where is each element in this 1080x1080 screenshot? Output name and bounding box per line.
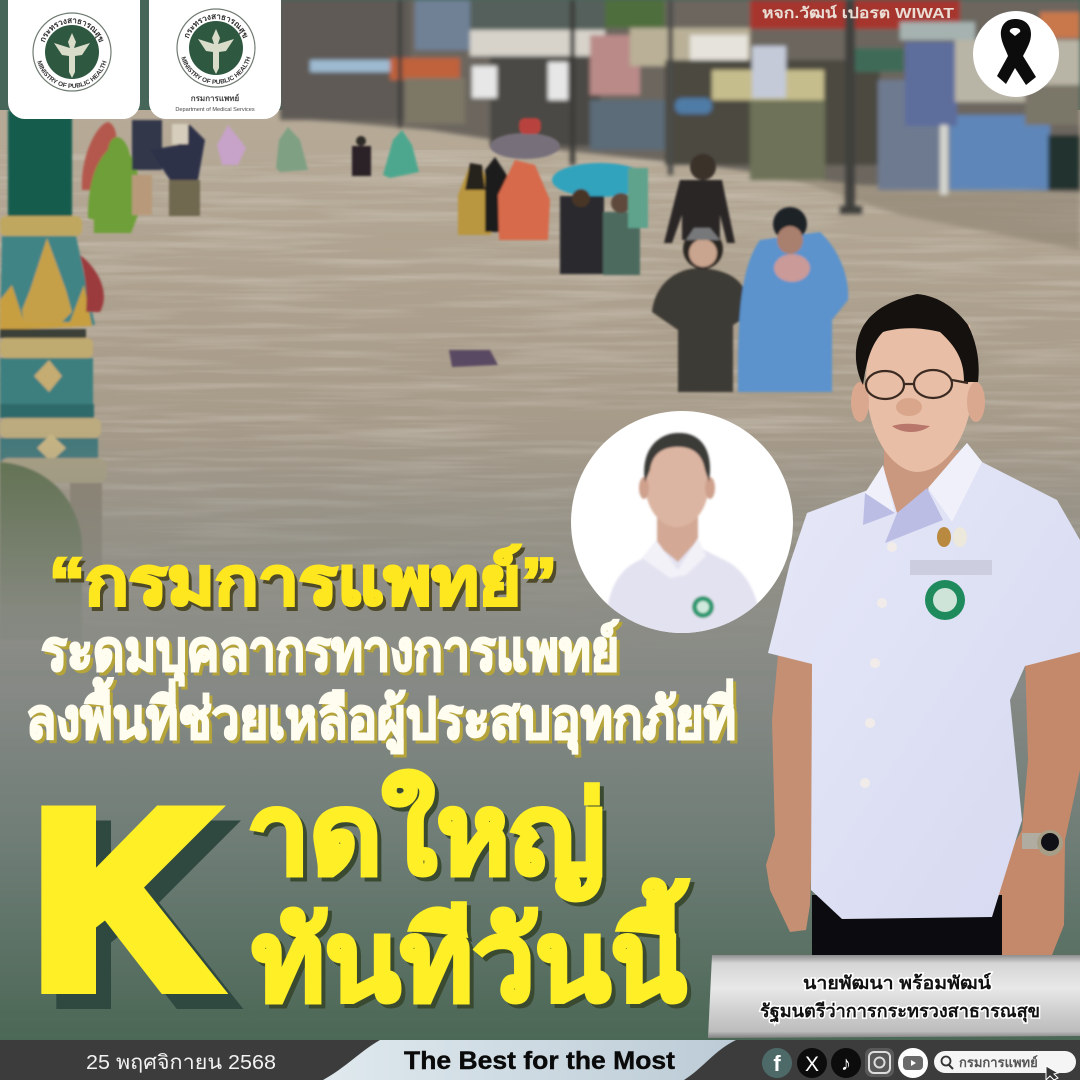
neck <box>884 450 960 513</box>
name plate: นายพัฒนา พร้อมพัฒน์ <box>803 972 992 993</box>
headline: immediately today: ทันทีวันนี้ <box>252 879 688 1024</box>
subheading line 2: ลงพื้นที่ช่วยเหลือผู้ประสบอุทกภัยที่ <box>26 678 736 754</box>
left arm and hand <box>766 655 812 932</box>
main portrait: minister <box>766 294 1080 955</box>
logo card: Department of Medical Services: กรมการแพทย์ <box>191 93 240 103</box>
name plate <box>708 955 1080 1038</box>
hair <box>856 294 979 385</box>
icon: X <box>797 1048 827 1078</box>
subheading line 1: ระดมบุคลากรทางการแพทย์ <box>44 622 622 689</box>
headline: Hat Yai <box>35 762 609 1051</box>
right arm and hand <box>993 650 1080 955</box>
flood water <box>0 110 1080 670</box>
icon: facebook: f <box>773 1051 781 1076</box>
headline: immediately today: ทันทีวันนี้ <box>256 883 692 1028</box>
icon: facebook <box>762 1048 792 1078</box>
glasses <box>866 370 968 399</box>
icon: TikTok <box>831 1048 861 1078</box>
icon: TikTok: ♪ <box>841 1053 851 1075</box>
face <box>866 325 974 472</box>
logo card: Ministry of Public Health: กระทรวงสาธารณสุข <box>40 18 104 42</box>
social icons <box>762 1048 1076 1080</box>
flood street photo background <box>0 0 1080 670</box>
subheading line 2: ลงพื้นที่ช่วยเหลือผู้ประสบอุทกภัยที่ <box>29 681 739 757</box>
collar <box>865 443 982 522</box>
shirt pocket <box>910 560 992 575</box>
logo card: Ministry of Public Health: MINISTRY OF PUBLIC HEALTH <box>37 60 107 88</box>
headline: Hat Yai: าดใหญ่ <box>247 771 605 901</box>
icon: Instagram <box>865 1048 894 1077</box>
name plate: รัฐมนตรีว่าการกระทรวงสาธารณสุข <box>760 1001 1040 1023</box>
wrist watch <box>1022 830 1063 856</box>
shophouses along the street <box>280 0 1080 214</box>
pillar ornament <box>0 110 107 640</box>
icon: mourning ribbon <box>973 11 1059 97</box>
shop sign lettering: หจก.วัฒน์ เปอรต WIWAT <box>762 4 954 22</box>
search pill: กรมการแพทย์ <box>959 1055 1038 1070</box>
logo card: Department of Medical Services: กระทรวงสาธารณสุข <box>184 14 248 38</box>
heading: department name: “กรมการแพทย์” <box>49 544 557 618</box>
logo card: Department of Medical Services: MINISTRY OF PUBLIC HEALTH <box>181 56 251 84</box>
slogan band <box>323 1040 736 1080</box>
search pill <box>934 1051 1076 1080</box>
trousers <box>812 895 1002 955</box>
inset portrait: department director <box>571 411 793 640</box>
logo card: Ministry of Public Health <box>8 0 140 119</box>
icon: X: X <box>805 1053 819 1076</box>
mouth <box>892 424 930 432</box>
date: 25 พฤศจิกายน 2568 <box>86 1052 276 1074</box>
icon: YouTube <box>898 1048 928 1078</box>
headline: Hat Yai: าดใหญ่ <box>251 775 609 905</box>
grey-green gradient overlay <box>0 430 1080 1080</box>
buttons <box>860 542 897 788</box>
subheading line 1: ระดมบุคลากรทางการแพทย์ <box>41 619 619 686</box>
logo card: Department of Medical Services <box>149 0 281 119</box>
footer bar <box>0 1040 1080 1080</box>
nose <box>896 398 922 416</box>
heading: department name: “กรมการแพทย์” <box>52 548 560 622</box>
logo card: Department of Medical Services: Department of Medical Services <box>175 107 255 113</box>
headline: Hat Yai: K <box>35 762 210 1036</box>
pin badges <box>937 527 967 547</box>
white shirt <box>768 443 1080 919</box>
shirt badge <box>925 580 965 620</box>
slogan: The Best for the Most <box>404 1047 676 1075</box>
headline: Hat Yai: K <box>50 777 225 1051</box>
wading people <box>82 118 848 392</box>
